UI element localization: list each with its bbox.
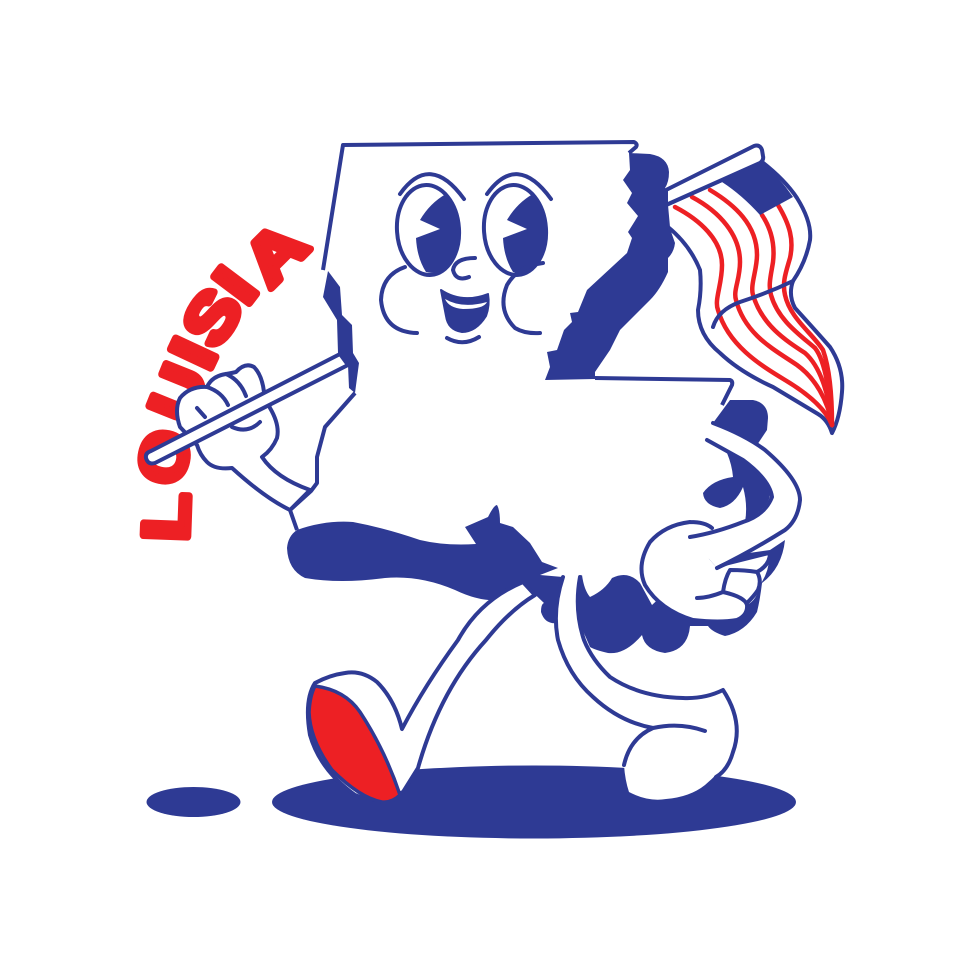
title: LOUISIA curved text: I	[156, 328, 231, 378]
title: LOUISIA curved text: L	[130, 492, 204, 542]
right arm and hand	[641, 423, 800, 622]
bayou shadow	[703, 453, 772, 522]
title: LOUISIA curved text: I	[200, 255, 271, 316]
west border shadow	[323, 271, 359, 393]
finger lines	[197, 374, 260, 430]
ground shadow small	[146, 787, 240, 817]
flag cloth	[666, 162, 842, 433]
red shoe sole	[309, 686, 400, 802]
flag stripes	[675, 190, 832, 425]
arm shadow band	[287, 505, 563, 623]
river shadow	[545, 153, 675, 380]
state body shadows	[287, 153, 785, 653]
fist	[177, 365, 310, 510]
teeth	[445, 299, 487, 309]
face	[381, 174, 551, 342]
right eye	[481, 174, 551, 277]
title: LOUISIA curved text: O	[124, 424, 206, 491]
right cheek	[503, 263, 543, 333]
flag fold	[713, 281, 793, 327]
arm fill	[690, 423, 800, 568]
flag	[666, 146, 842, 433]
hip shadow	[713, 400, 768, 445]
knee and hand shadow	[577, 540, 785, 653]
title: LOUISIA curved text: A	[228, 206, 322, 300]
nose	[453, 258, 475, 278]
left eye	[394, 174, 464, 277]
title: LOUISIA curved text: S	[168, 276, 257, 359]
title: LOUISIA curved text	[124, 206, 322, 542]
lower lip	[447, 337, 479, 342]
left cheek	[381, 267, 417, 333]
title: LOUISIA curved text: U	[135, 355, 222, 432]
arm lines	[690, 423, 800, 568]
flag canton	[722, 162, 793, 215]
hand	[641, 522, 769, 622]
pole left	[146, 354, 348, 463]
front leg	[308, 582, 535, 802]
back leg and shoe	[556, 577, 737, 800]
flag pole right	[666, 146, 763, 205]
mouth	[441, 290, 489, 332]
ground shadow large	[272, 766, 796, 838]
left hand holding pole	[146, 354, 348, 510]
state outline	[290, 142, 732, 530]
